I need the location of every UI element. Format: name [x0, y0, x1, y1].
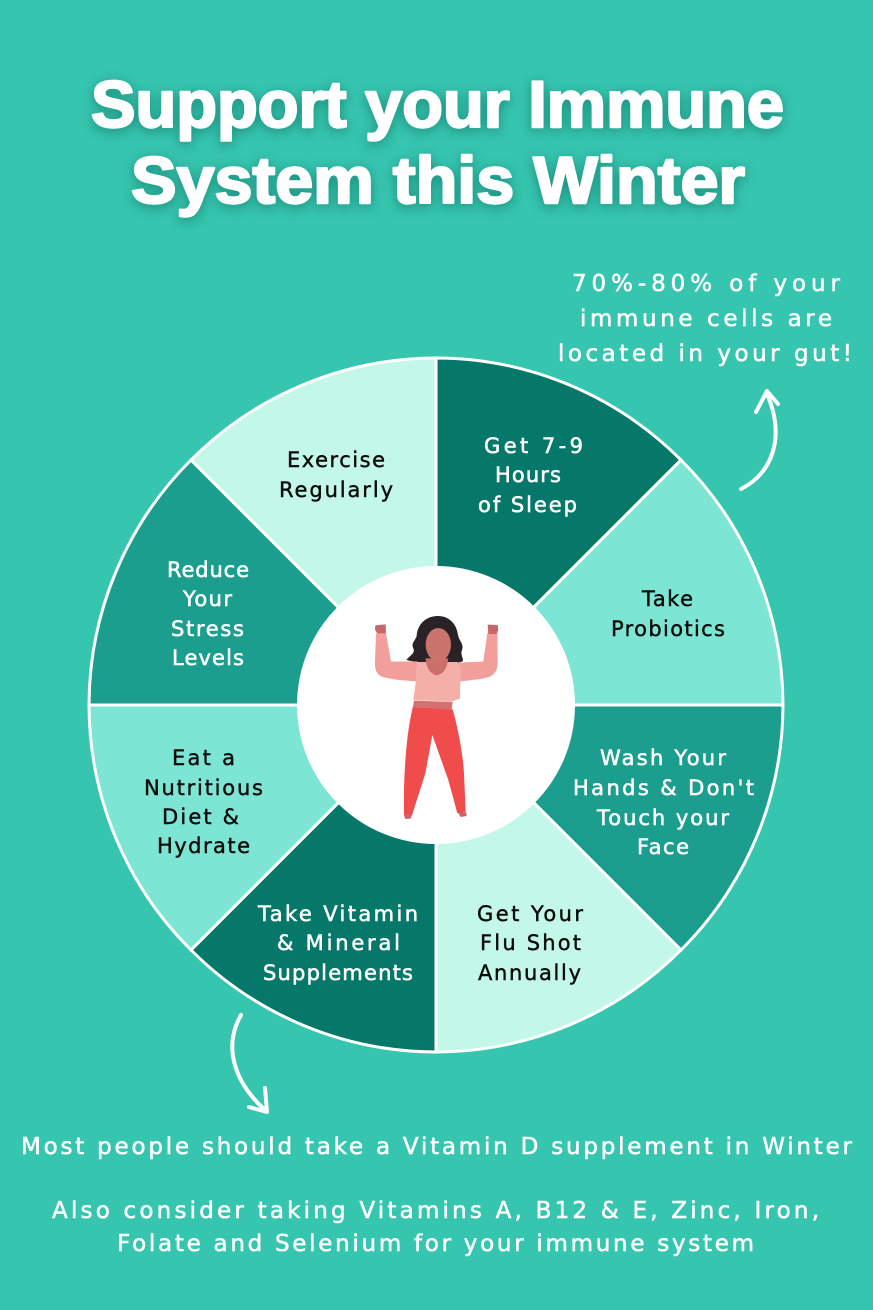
- left fist: [375, 624, 386, 633]
- label: vitamin and mineral supplements: Supplements: [263, 961, 413, 985]
- arrow: down to vitamin D note: [232, 1015, 267, 1112]
- center circle: [297, 566, 575, 844]
- label: flu shot: Flu Shot: [480, 931, 581, 955]
- label: get 7-9 hours of sleep: [478, 434, 583, 517]
- title: [91, 67, 784, 217]
- callout: gut immune cells: immune cells are: [580, 306, 832, 332]
- jacket: [413, 662, 461, 702]
- right foot: [458, 812, 467, 817]
- segment: wash your hands: [436, 705, 783, 950]
- label: wash your hands: [573, 746, 754, 859]
- label: flu shot: Annually: [478, 961, 581, 985]
- label: flu shot: Get Your: [477, 902, 583, 926]
- label: wash your hands: Hands & Don't: [573, 776, 754, 800]
- label: nutritious diet: Nutritious: [144, 776, 263, 800]
- note: other vitamins and minerals: Also consider taking Vitamins A, B12 & E, Zinc, Iron,: [52, 1198, 819, 1224]
- label: get 7-9 hours of sleep: Get 7-9: [484, 434, 583, 458]
- label: reduce stress: Reduce: [167, 558, 249, 582]
- label: reduce stress: Your: [182, 587, 232, 611]
- label: vitamin and mineral supplements: Take Vitamin: [257, 902, 418, 926]
- arrow: up to gut callout: [741, 391, 778, 489]
- trousers: [404, 708, 466, 815]
- segment: nutritious diet: [89, 705, 436, 950]
- segment: vitamin and mineral supplements: [191, 705, 436, 1052]
- label: wash your hands: Wash Your: [600, 746, 726, 770]
- right arm: [457, 633, 498, 681]
- label: wash your hands: Face: [637, 835, 689, 859]
- face: [426, 628, 451, 661]
- callout: gut immune cells: [558, 271, 852, 367]
- waistband: [413, 701, 453, 709]
- label: wash your hands: Touch your: [596, 806, 729, 830]
- label: reduce stress: Stress: [171, 617, 244, 641]
- note: other vitamins and minerals: Folate and Selenium for your immune system: [117, 1231, 754, 1257]
- segment: reduce stress: [89, 460, 436, 705]
- label: exercise regularly: [279, 448, 393, 502]
- label: flu shot: [477, 902, 583, 985]
- label: exercise regularly: Regularly: [279, 478, 393, 502]
- segment: exercise regularly: [191, 358, 436, 705]
- title: System this Winter: [131, 143, 745, 217]
- callout: gut immune cells: located in your gut!: [558, 341, 852, 367]
- label: nutritious diet: [144, 746, 263, 858]
- label: vitamin and mineral supplements: [257, 902, 418, 985]
- callout: gut immune cells: 70%-80% of your: [572, 271, 841, 297]
- note: vitamin D: Most people should take a Vitamin D supplement in Winter: [21, 1134, 853, 1160]
- icon: flexing woman: [375, 616, 498, 819]
- note: other vitamins and minerals: [52, 1198, 819, 1257]
- label: take probiotics: Probiotics: [611, 617, 725, 641]
- label: nutritious diet: Diet &: [162, 805, 239, 829]
- label: take probiotics: [611, 587, 725, 641]
- segment: get 7-9 hours of sleep: [436, 358, 681, 705]
- label: get 7-9 hours of sleep: Hours: [495, 463, 561, 487]
- label: reduce stress: Levels: [172, 646, 244, 670]
- wheel chart: [89, 358, 783, 1052]
- hair: [406, 616, 463, 663]
- neck: [426, 658, 448, 675]
- label: reduce stress: [167, 558, 249, 670]
- right fist: [488, 625, 498, 634]
- label: vitamin and mineral supplements: & Mineral: [277, 931, 400, 955]
- segment: take probiotics: [436, 460, 783, 705]
- label: get 7-9 hours of sleep: of Sleep: [478, 493, 577, 517]
- left arm: [375, 633, 417, 681]
- title: Support your Immune: [91, 67, 784, 141]
- label: nutritious diet: Hydrate: [157, 834, 250, 858]
- label: take probiotics: Take: [641, 587, 693, 611]
- label: exercise regularly: Exercise: [287, 448, 385, 472]
- segment: flu shot: [436, 705, 681, 1052]
- label: nutritious diet: Eat a: [172, 746, 235, 770]
- left foot: [404, 815, 412, 819]
